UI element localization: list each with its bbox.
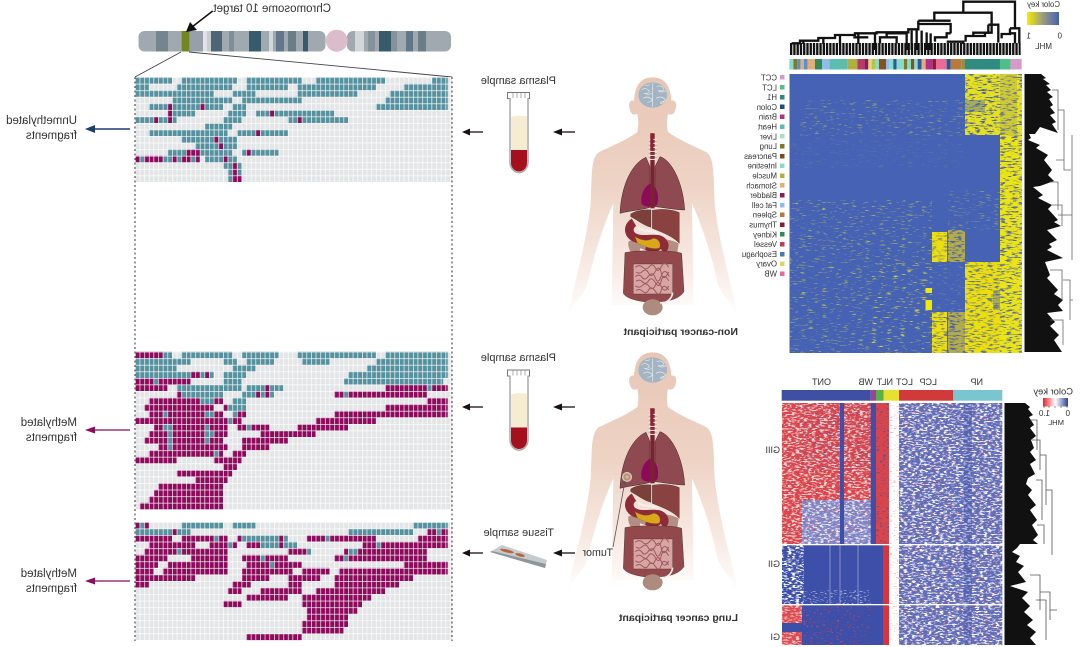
colour key: cohort heatmap: MHL	[1048, 418, 1064, 427]
tissue legend: Lung	[760, 142, 777, 151]
colour key: tissue heatmap: 1	[1026, 32, 1031, 40]
chromosome target label: Chromosome 10 target	[213, 3, 331, 15]
sample colour strip	[789, 59, 1022, 70]
arrows: tissue row	[462, 550, 575, 556]
tissue legend: Brain	[759, 113, 777, 122]
magenta methylated cells	[135, 355, 448, 506]
label: plasma sample top: Plasma sample	[481, 75, 556, 87]
label: unmethylated fragments: Unmethylated	[6, 115, 77, 127]
tissue legend: Spleen	[753, 211, 777, 220]
tissue legend: Heart	[757, 122, 777, 132]
subtype labels: GI	[770, 632, 780, 642]
arrow: chromosome target	[186, 11, 213, 32]
tissue legend: WB	[764, 270, 777, 278]
tissue legend: Esophagu	[742, 250, 777, 259]
subtype labels: GII	[768, 559, 780, 569]
icon: tissue slide	[490, 545, 547, 568]
label: unmethylated fragments: fragments	[26, 130, 77, 142]
arrow: unmethylated	[85, 125, 130, 133]
colour key: tissue heatmap: MHL	[1035, 42, 1052, 51]
tissue legend: Pancreas	[744, 152, 777, 161]
label: methylated fragments tissue	[21, 568, 77, 595]
cohort labels: LCT	[895, 377, 913, 387]
subtype labels: GIII	[765, 445, 780, 455]
heatmap: cohort MHL	[782, 403, 1002, 645]
figure: lung cancer participant	[568, 352, 737, 592]
chromosome 10 ideogram	[138, 30, 451, 52]
cohort labels: NP	[970, 377, 983, 387]
label: methylated fragments tissue: Methylated	[21, 568, 77, 580]
colour key: cohort heatmap: 1.0	[1038, 409, 1050, 418]
label: methylated fragments plasma: Methylated	[21, 417, 77, 429]
cohort labels: NLT	[876, 377, 893, 387]
zoom lines	[135, 52, 452, 77]
panel: unmethylated plasma fragments grid	[135, 77, 452, 182]
tissue legend: Kidney	[753, 230, 777, 239]
colour key: cohort heatmap	[1033, 386, 1073, 427]
colour key: tissue heatmap	[1026, 0, 1062, 51]
icon: blood tube bottom	[508, 370, 530, 450]
label: lung cancer participant: Lung cancer participant	[618, 612, 738, 624]
label: unmethylated fragments	[6, 115, 77, 142]
tissue legend: H1	[767, 93, 777, 102]
row dendrogram: cohort	[1004, 403, 1057, 645]
teal unmethylated cells	[135, 355, 448, 454]
arrow: methylated tissue	[85, 578, 130, 584]
label: plasma sample bottom: Plasma sample	[481, 352, 556, 364]
panel: tumor tissue fragments grid	[135, 522, 452, 640]
tissue legend: Colon	[757, 103, 777, 112]
tissue legend: Vessel	[754, 240, 777, 249]
arrow: methylated plasma	[85, 426, 130, 434]
tissue legend: Bladder	[750, 191, 777, 200]
tissue legend: Fat cell	[752, 201, 777, 210]
arrows: top row	[462, 128, 575, 136]
cohort colour strip	[782, 390, 1002, 401]
tissue legend	[742, 74, 784, 278]
heatmap: tissue MHL	[790, 74, 1022, 353]
label: methylated fragments tissue: fragments	[26, 583, 77, 595]
tissue legend: Ovary	[756, 260, 777, 269]
teal unmethylated cells	[135, 80, 448, 179]
cohort labels: LCP	[919, 377, 937, 387]
label: tissue sample: Tissue sample	[483, 527, 554, 539]
row dendrogram: tissue	[1024, 74, 1073, 352]
magenta methylated cells	[135, 525, 448, 637]
dashed borders of grids	[135, 77, 452, 641]
tissue legend: Muscle	[752, 172, 777, 180]
label: methylated fragments plasma	[21, 417, 77, 444]
label: non-cancer participant: Non-cancer participant	[623, 326, 738, 338]
teal unmethylated cells	[135, 525, 448, 565]
tumor callout	[582, 472, 632, 559]
subtype labels	[765, 445, 780, 642]
top dendrogram	[790, 2, 1021, 50]
panel: cancer plasma fragments grid	[135, 352, 452, 509]
yellow block: H1/LCT columns	[965, 74, 1000, 135]
tissue legend: CCT	[761, 74, 777, 82]
cohort labels	[812, 377, 983, 387]
cohort labels: ONT	[812, 377, 831, 387]
tissue legend: Intestine	[748, 162, 777, 171]
tissue legend: Stomach	[746, 181, 777, 190]
figure: non-cancer participant	[568, 77, 737, 317]
magenta methylated cells	[135, 107, 302, 179]
tumor callout: Tumor	[582, 547, 613, 559]
icon: blood tube top	[508, 92, 530, 173]
tissue legend: LCT	[762, 83, 777, 92]
label: methylated fragments plasma: fragments	[26, 432, 77, 444]
cohort labels: WB	[858, 377, 873, 387]
yellow block: CCT column	[1000, 74, 1022, 353]
colour key: cohort heatmap: Color key	[1033, 386, 1073, 396]
tissue legend: Liver	[760, 132, 777, 141]
tissue legend: Thymus	[749, 220, 777, 230]
colour key: tissue heatmap: 0	[1057, 32, 1062, 40]
highlighted target band	[182, 31, 189, 52]
arrows: middle row	[462, 404, 575, 410]
colour key: cohort heatmap: 0	[1065, 409, 1070, 418]
colour key: tissue heatmap: Color key	[1027, 0, 1060, 9]
